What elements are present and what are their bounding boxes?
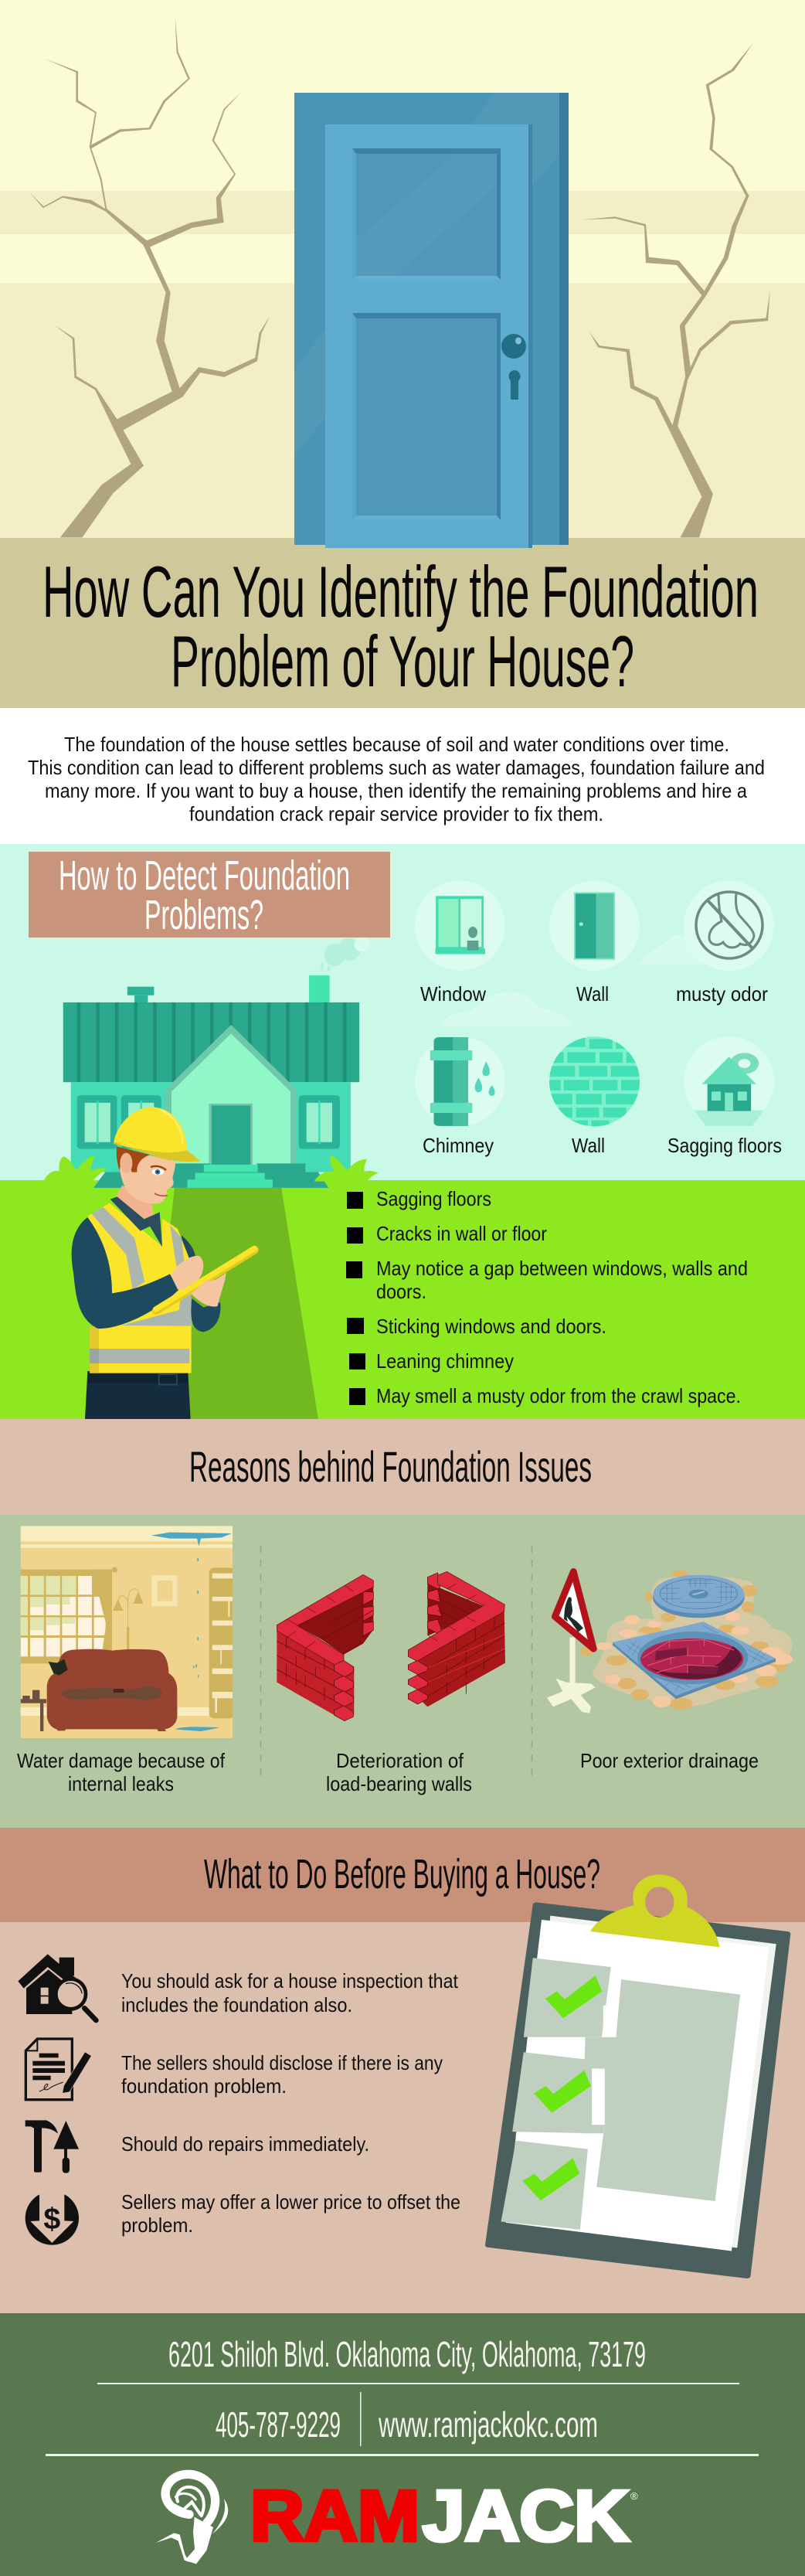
- illustration: road sign and open manhole: [547, 1570, 793, 1713]
- grass tufts: [43, 1155, 379, 1182]
- skirting: [21, 1707, 209, 1716]
- icon: hammer and trowel: [25, 2120, 79, 2173]
- heading: how to detect foundation problems: How to Detect Foundation: [59, 852, 350, 899]
- clipboard: [489, 1875, 787, 2276]
- icon: window: [415, 880, 505, 971]
- side table: [21, 1690, 46, 1731]
- icon: price drop: [25, 2191, 79, 2245]
- icon: no smell nose: [696, 892, 763, 958]
- left arm: [72, 1217, 179, 1329]
- clouds: [439, 936, 729, 1026]
- ceiling leak: [151, 1533, 232, 1547]
- checklist text: Leaning chimney: [376, 1349, 514, 1373]
- illustration: broken brick walls: [277, 1571, 505, 1721]
- checklist text: May notice a gap between windows, walls and: [376, 1257, 748, 1280]
- heading: how to detect foundation problems: [59, 852, 350, 938]
- intro text: many more. If you want to buy a house, then identify the remaining problems and hire a: [45, 779, 747, 802]
- icon labels: Wall: [576, 982, 609, 1006]
- bullet squares: [346, 1192, 365, 1405]
- title: [42, 551, 759, 702]
- icon circle: musty odor background: [684, 880, 774, 971]
- sofa stain: [62, 1686, 162, 1700]
- right sleeve: [182, 1235, 195, 1262]
- reason captions: internal leaks: [68, 1772, 174, 1795]
- hard hat: [114, 1107, 200, 1162]
- icon: door wall: [549, 880, 640, 971]
- reasons heading band: [0, 1419, 805, 1515]
- intro text: The foundation of the house settles because of soil and water conditions over time.: [64, 733, 729, 756]
- manhole lid: [653, 1575, 745, 1618]
- garden path: [149, 1188, 318, 1419]
- trousers: [85, 1371, 191, 1419]
- icon labels: Wall: [572, 1134, 605, 1157]
- door: [294, 93, 569, 548]
- icon labels: [420, 982, 782, 1157]
- checklist text: Sagging floors: [376, 1187, 491, 1210]
- checklist text: Cracks in wall or floor: [376, 1222, 547, 1245]
- footer phone: 405-787-9229: [216, 2404, 341, 2445]
- icon: signed document: [25, 2039, 91, 2100]
- reason captions: Deterioration of: [336, 1749, 464, 1772]
- hands and tablet: [156, 1248, 254, 1311]
- wordmark RAM: RAM: [250, 2476, 419, 2556]
- cushion: [49, 1659, 68, 1676]
- picture frame: [152, 1575, 177, 1606]
- icon: price drop: $: [43, 2202, 60, 2236]
- before buying text: [121, 1969, 460, 2237]
- icon labels: Window: [420, 982, 486, 1006]
- reason captions: Poor exterior drainage: [580, 1749, 759, 1772]
- illustrations: house, clouds, icons: [43, 880, 774, 1419]
- checklist text: Sticking windows and doors.: [376, 1315, 606, 1338]
- intro text: [28, 733, 765, 825]
- right wall section: [408, 1571, 505, 1707]
- checklist text: [376, 1187, 748, 1407]
- keyhole: [508, 370, 521, 400]
- sofa: [47, 1649, 177, 1731]
- before buying text: Should do repairs immediately.: [121, 2132, 369, 2156]
- before buying icons: [18, 1954, 96, 2245]
- reason captions: Water damage because of: [17, 1749, 226, 1772]
- checklist text: doors.: [376, 1280, 426, 1303]
- door knob: [501, 334, 526, 359]
- upper door panel: [352, 148, 501, 280]
- detection checklist: [346, 1187, 748, 1407]
- logo: Ram Jack: [156, 2474, 638, 2564]
- icon: brick wall: [549, 1036, 642, 1128]
- reason captions: load-bearing walls: [326, 1772, 472, 1795]
- panel: reasons: [0, 1515, 805, 1829]
- intro text: foundation crack repair service provider to fix them.: [189, 802, 603, 825]
- remote: [114, 1689, 124, 1693]
- panel: how to detect: [0, 844, 805, 1420]
- chimney smoke: [321, 937, 369, 971]
- registered mark: ®: [630, 2490, 638, 2502]
- reason captions: [17, 1749, 759, 1795]
- right wall crack: [581, 43, 770, 537]
- checklist text: May smell a musty odor from the crawl space.: [376, 1384, 741, 1407]
- worker illustration: [72, 1107, 254, 1419]
- shirt collar: [110, 1196, 162, 1247]
- icon labels: Sagging floors: [667, 1134, 782, 1157]
- left wall section: [277, 1574, 373, 1721]
- icon: chimney pipe: [415, 1036, 505, 1126]
- intro panel: [0, 708, 805, 844]
- window: [21, 1567, 117, 1663]
- before buying text: The sellers should disclose if there is any: [121, 2051, 443, 2074]
- icon: ram head: [156, 2474, 228, 2564]
- bookshelf: [209, 1567, 235, 1718]
- vest: [87, 1203, 192, 1373]
- before buying text: includes the foundation also.: [121, 1993, 352, 2016]
- manhole frame and brick shaft: [613, 1621, 776, 1699]
- heading panel: how to detect: [29, 852, 390, 938]
- check marks: [522, 1975, 602, 2200]
- road sign: [547, 1571, 596, 1713]
- right forearm: [191, 1298, 220, 1332]
- left wall crack: [30, 16, 270, 537]
- floor puddle: [175, 1727, 220, 1731]
- panel: footer: [0, 2313, 805, 2576]
- before buying text: foundation problem.: [121, 2074, 287, 2098]
- checklist blocks: [501, 1958, 740, 2230]
- before buying text: You should ask for a house inspection that: [121, 1969, 459, 1992]
- heading: how to detect foundation problems: Problems?: [144, 892, 263, 938]
- illustration: water damaged room: [21, 1526, 235, 1738]
- buying heading band: [0, 1828, 805, 1923]
- before buying text: Sellers may offer a lower price to offset the: [121, 2190, 460, 2214]
- wordmark JACK: JACK: [423, 2476, 629, 2556]
- hero: cracked wall with door: [0, 0, 805, 548]
- before buying text: problem.: [121, 2214, 193, 2237]
- clip: [590, 1875, 720, 1947]
- icon: sagging floors house: [684, 1036, 774, 1126]
- rubble: [580, 1570, 793, 1710]
- footer website: www.ramjackokc.com: [378, 2404, 598, 2445]
- neck and head: [116, 1146, 175, 1219]
- icon labels: Chimney: [423, 1134, 494, 1157]
- house: [63, 975, 359, 1188]
- lower door panel: [352, 313, 501, 520]
- icon: house inspection: [18, 1954, 96, 2020]
- title band: [0, 538, 805, 708]
- panel: before buying: [0, 1922, 805, 2313]
- icon labels: musty odor: [676, 982, 768, 1006]
- floor lamp: [113, 1589, 144, 1652]
